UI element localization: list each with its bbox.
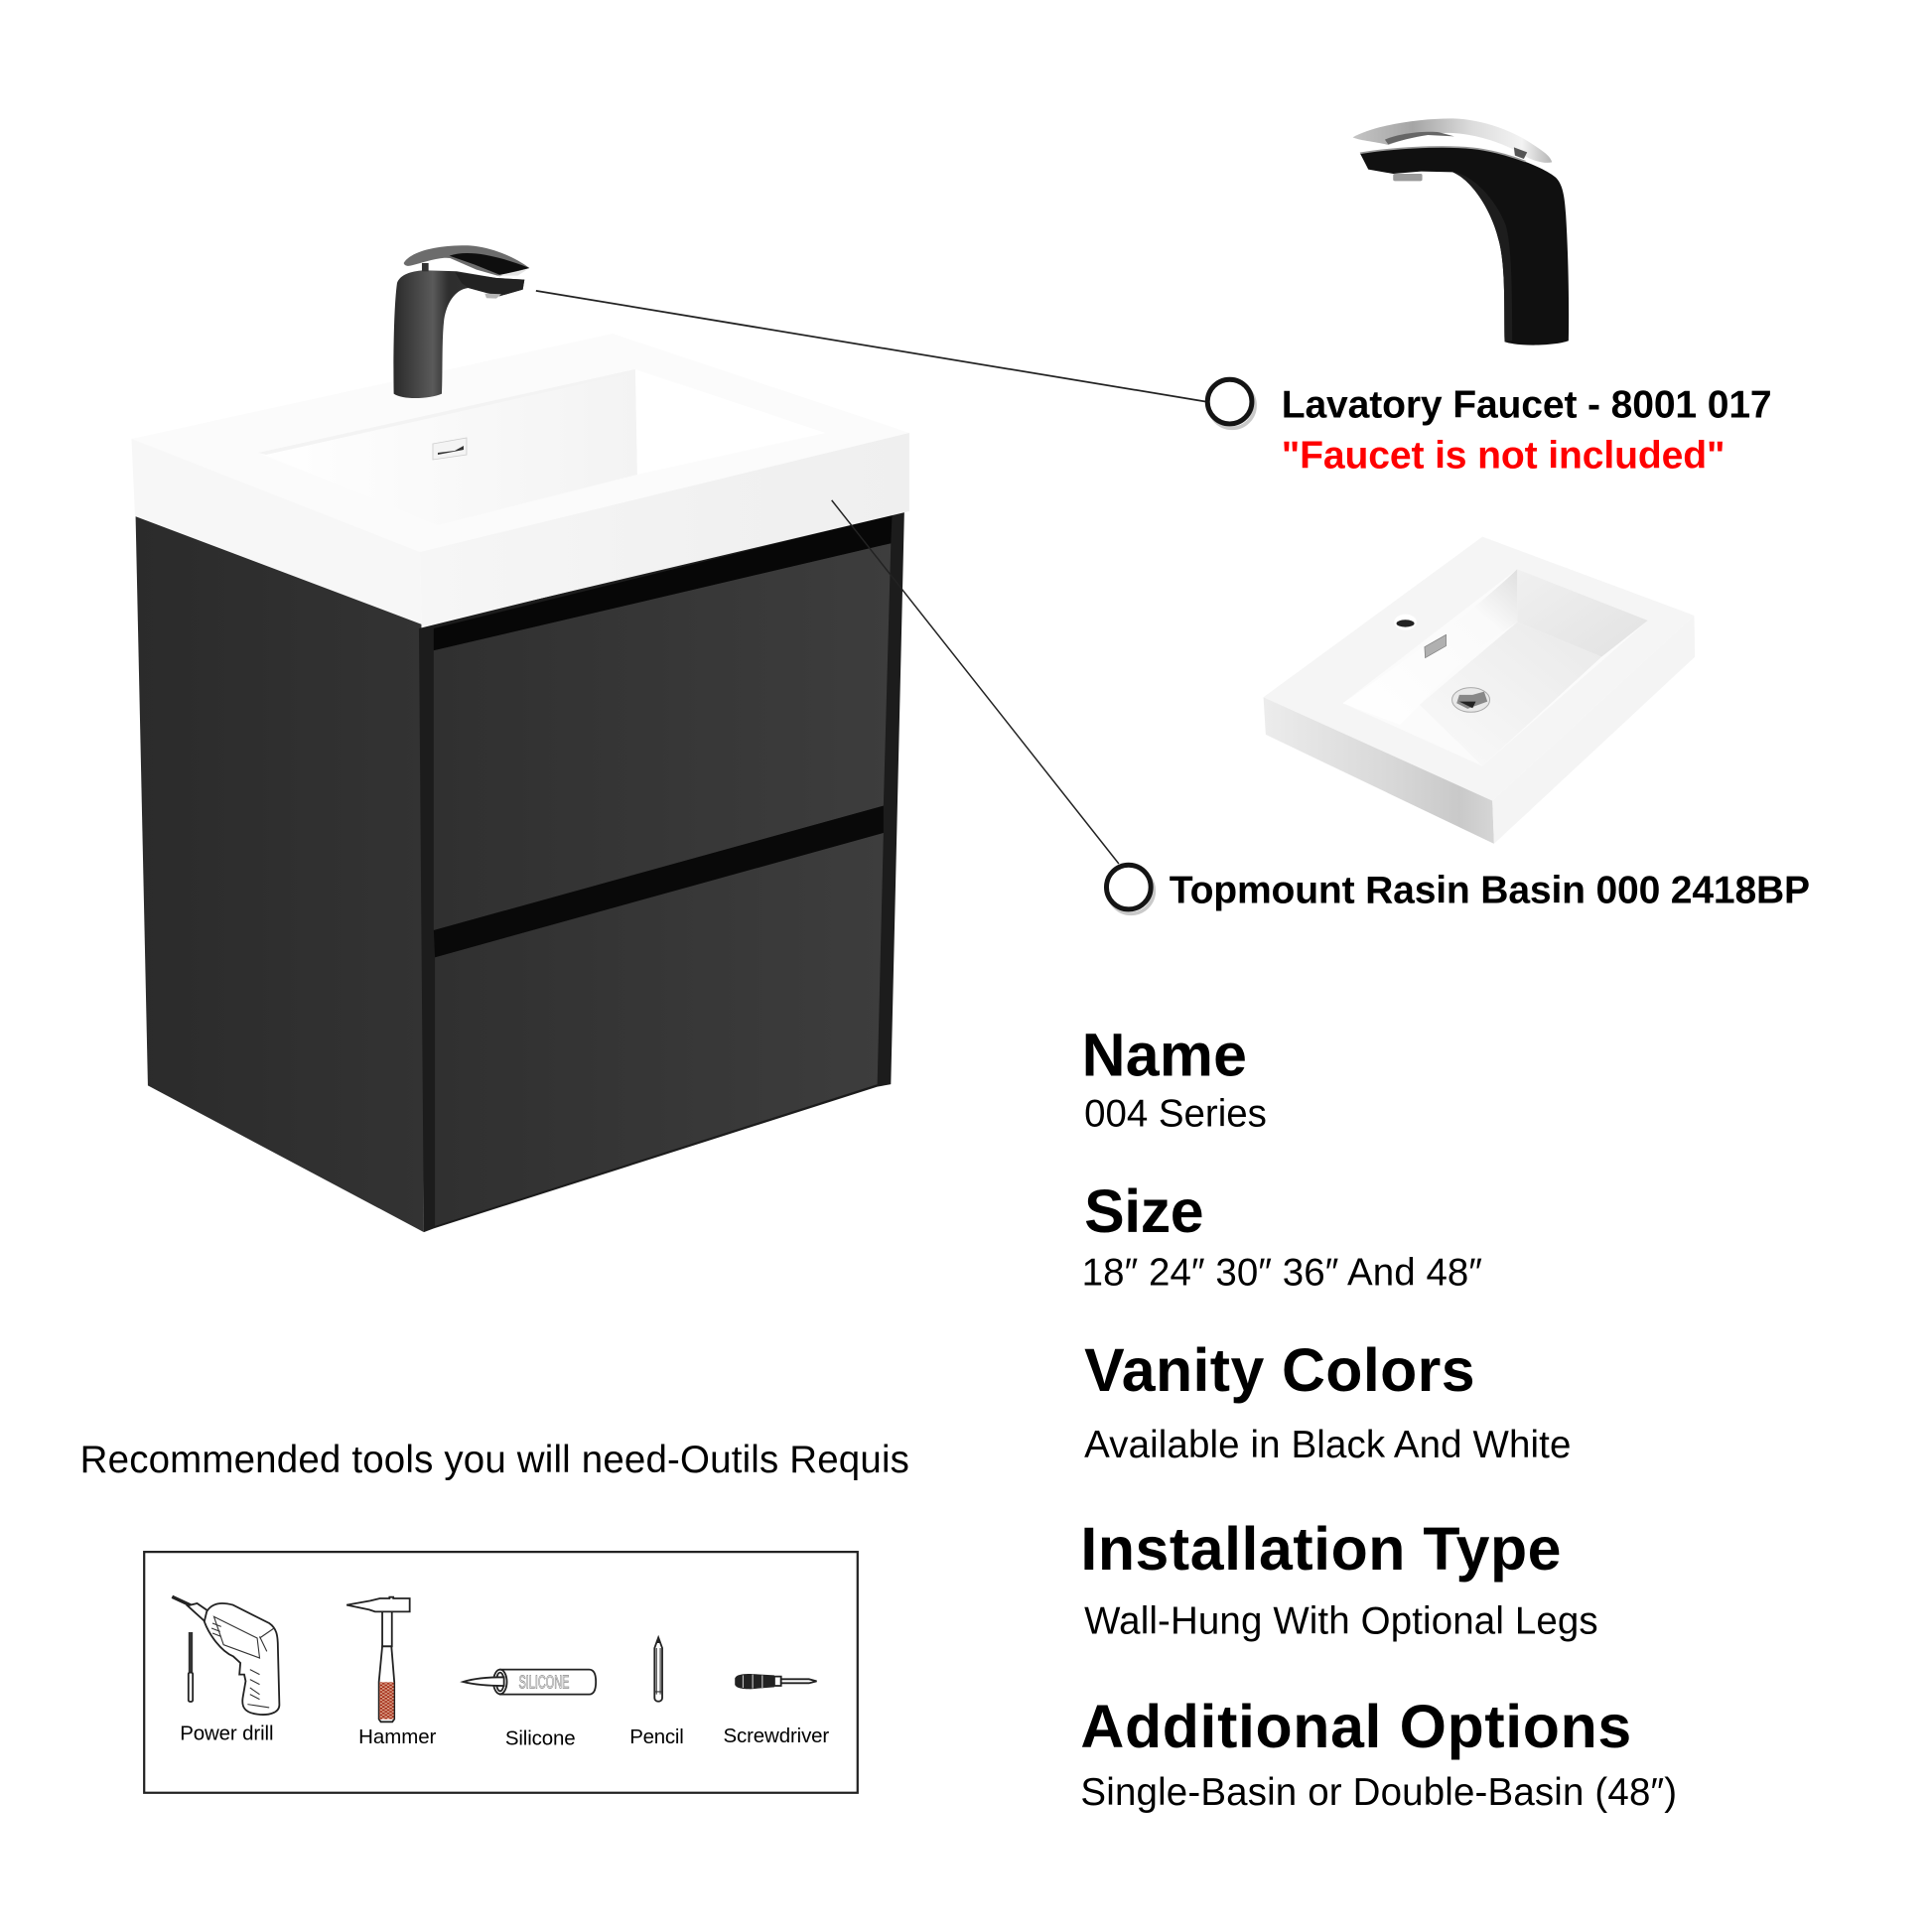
bowl back wall — [1517, 569, 1648, 657]
spec: size: 18″ 24″ 30″ 36″ And 48″ — [1082, 1251, 1482, 1294]
spec: installation type: Wall-Hung With Optional Legs — [1084, 1600, 1598, 1643]
handle shadow strip — [1385, 132, 1454, 144]
spec: vanity colors — [1084, 1336, 1571, 1466]
spec: additional options — [1080, 1693, 1677, 1814]
recommended tools heading: Recommended tools you will need-Outils Requis — [80, 1439, 909, 1481]
spec: size — [1082, 1177, 1482, 1294]
spec: name: 004 Series — [1084, 1092, 1267, 1135]
basin left side — [1264, 697, 1494, 844]
basin right side — [1492, 616, 1695, 844]
top recessed gap — [434, 515, 893, 650]
leader line to basin label — [832, 500, 1119, 864]
aerator — [484, 294, 501, 299]
icon: screwdriver — [735, 1674, 817, 1689]
spec: name: Name — [1082, 1021, 1247, 1088]
cabinet side panel — [136, 514, 424, 1232]
label: hammer: Hammer — [358, 1725, 437, 1748]
basin label: Topmount Rasin Basin 000 2418BP — [1170, 870, 1810, 912]
icon: silicone tube — [463, 1670, 596, 1695]
bowl front slope — [1343, 569, 1648, 766]
silicone tube lettering: SILICONE — [518, 1671, 569, 1692]
spec: installation type — [1080, 1515, 1598, 1643]
sink, drawn in source pixels — [131, 334, 909, 626]
tools panel — [144, 1552, 858, 1793]
leader line to faucet label — [536, 291, 1206, 402]
black body — [1360, 147, 1569, 345]
panel border — [144, 1552, 858, 1793]
bowl right wall — [635, 369, 825, 475]
sink top surface — [131, 334, 909, 552]
basin top — [1264, 537, 1695, 801]
faucet hole — [1394, 615, 1417, 630]
spec: vanity colors: Vanity Colors — [1084, 1336, 1475, 1404]
handle stem — [422, 263, 429, 271]
cabinet front frame — [419, 509, 904, 1232]
faucet label: Lavatory Faucet - 8001 017 — [1282, 384, 1772, 427]
label: power drill: Power drill — [180, 1722, 274, 1744]
label: screwdriver: Screwdriver — [724, 1725, 829, 1747]
tool icons — [172, 1596, 817, 1722]
sink front right face — [420, 433, 909, 626]
faucet product photo — [1353, 118, 1569, 345]
icon: power drill — [172, 1596, 279, 1715]
middle recessed gap — [434, 806, 884, 957]
upper drawer — [434, 543, 891, 930]
chrome handle — [1353, 118, 1552, 163]
spec: additional options: Additional Options — [1080, 1693, 1631, 1760]
aerator — [1393, 174, 1423, 181]
bowl rear edge shadow — [258, 369, 635, 455]
body soft highlight — [1452, 172, 1512, 342]
spec: vanity colors: Available in Black And White — [1084, 1424, 1571, 1466]
spout tip shade — [455, 272, 524, 296]
faucet on vanity — [393, 245, 529, 398]
lip highlight — [1360, 147, 1526, 162]
handle highlight — [496, 269, 528, 276]
overflow trim — [433, 438, 467, 460]
overflow — [1425, 634, 1447, 658]
handle top — [404, 245, 529, 276]
handle black face — [450, 253, 529, 275]
faucet body — [393, 270, 524, 398]
spec: installation type: Installation Type — [1080, 1515, 1561, 1583]
callout marker: basin — [1106, 865, 1154, 913]
handle stem — [1514, 147, 1527, 159]
icon: pencil — [654, 1637, 662, 1702]
bowl back and floor — [258, 369, 637, 525]
spec: additional options: Single-Basin or Double-Basin (48″) — [1080, 1771, 1677, 1814]
faucet not included warning: "Faucet is not included" — [1282, 435, 1725, 478]
callout marker: faucet — [1207, 379, 1255, 428]
label: silicone: Silicone — [505, 1726, 576, 1749]
sink front left face — [131, 439, 422, 624]
basin product photo — [1264, 537, 1695, 844]
vanity cabinet with sink — [131, 334, 909, 1232]
bowl floor — [1420, 622, 1601, 766]
label: pencil: Pencil — [629, 1725, 684, 1748]
spec: name — [1082, 1021, 1267, 1135]
spec: size: Size — [1084, 1177, 1204, 1245]
bowl slant wall — [1343, 569, 1517, 725]
lower drawer — [435, 833, 884, 1226]
drain — [1452, 688, 1490, 712]
icon: hammer — [346, 1597, 410, 1722]
